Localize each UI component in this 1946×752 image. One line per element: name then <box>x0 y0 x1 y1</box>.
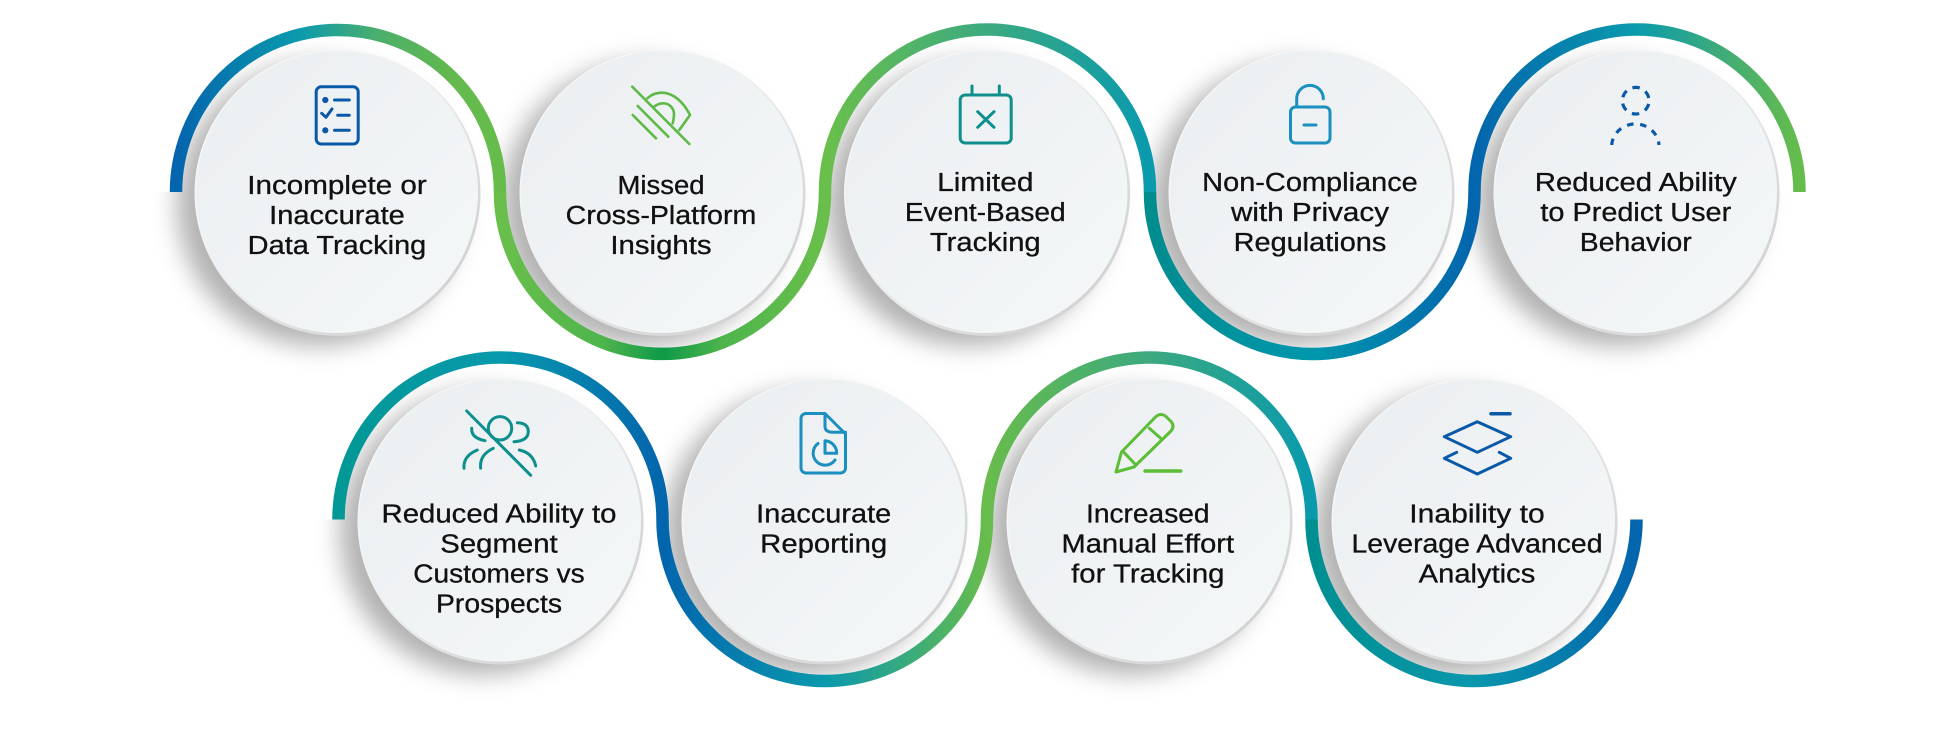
label: with Privacy <box>1230 199 1389 227</box>
panel: Reduced Ability to Predict User Behavior <box>1476 50 1780 346</box>
label: Event-Based <box>905 199 1066 227</box>
label: Inability to <box>1409 500 1545 528</box>
label: Reduced Ability <box>1535 169 1737 197</box>
label: Manual Effort <box>1062 530 1234 558</box>
label: Inaccurate <box>269 202 405 230</box>
label: Insights <box>610 232 712 260</box>
icon: pencil <box>1116 414 1181 472</box>
panel: Limited Event-Based Tracking <box>826 50 1130 346</box>
label: Incomplete or <box>247 172 427 200</box>
label: Customers vs <box>413 560 585 588</box>
label <box>1062 500 1234 588</box>
label <box>1202 169 1418 257</box>
label: Regulations <box>1234 229 1386 257</box>
label: Tracking <box>930 229 1041 257</box>
label: Segment <box>440 530 558 558</box>
icon: checklist <box>316 87 358 144</box>
panel: Increased Manual Effort for Tracking <box>989 378 1292 674</box>
panel: Reduced Ability to Segment Customers vs Prospects <box>340 378 644 674</box>
panel: Missed Cross-Platform Insights <box>502 50 806 346</box>
label: to Predict User <box>1540 199 1732 227</box>
label <box>247 172 427 260</box>
label: Limited <box>937 169 1034 197</box>
label: for Tracking <box>1071 560 1225 588</box>
icon: report document with pie chart <box>801 414 846 473</box>
panel: Incomplete or Inaccurate Data Tracking <box>177 50 480 346</box>
label: Leverage Advanced <box>1352 530 1602 558</box>
icon: crossed-out eye <box>632 87 690 144</box>
label <box>905 169 1066 257</box>
ribbon: top row wave <box>176 30 1800 354</box>
label: Non-Compliance <box>1202 169 1418 197</box>
label: Analytics <box>1419 560 1535 588</box>
panel: Non-Compliance with Privacy Regulations <box>1151 50 1454 346</box>
label <box>1535 169 1737 257</box>
label: Reporting <box>760 530 887 558</box>
icon: dashed person <box>1612 87 1659 145</box>
label <box>566 172 756 260</box>
label <box>1352 500 1602 588</box>
icon: open padlock <box>1290 85 1330 143</box>
icon: crossed-out people <box>464 411 536 475</box>
label: Increased <box>1086 500 1210 528</box>
label: Behavior <box>1580 229 1692 257</box>
icon: calendar with cross <box>960 86 1011 143</box>
label: Prospects <box>436 590 562 618</box>
icon: layers <box>1444 414 1511 474</box>
label: Data Tracking <box>248 232 426 260</box>
ribbon: bottom row wave <box>338 358 1636 681</box>
panel: Inability to Leverage Advanced Analytics <box>1314 378 1618 674</box>
label: Cross-Platform <box>566 202 756 230</box>
label: Reduced Ability to <box>382 500 616 528</box>
label: Inaccurate <box>756 500 891 528</box>
label: Missed <box>618 172 704 200</box>
label <box>756 500 891 558</box>
panel: Inaccurate Reporting <box>664 378 968 674</box>
label <box>382 500 616 618</box>
